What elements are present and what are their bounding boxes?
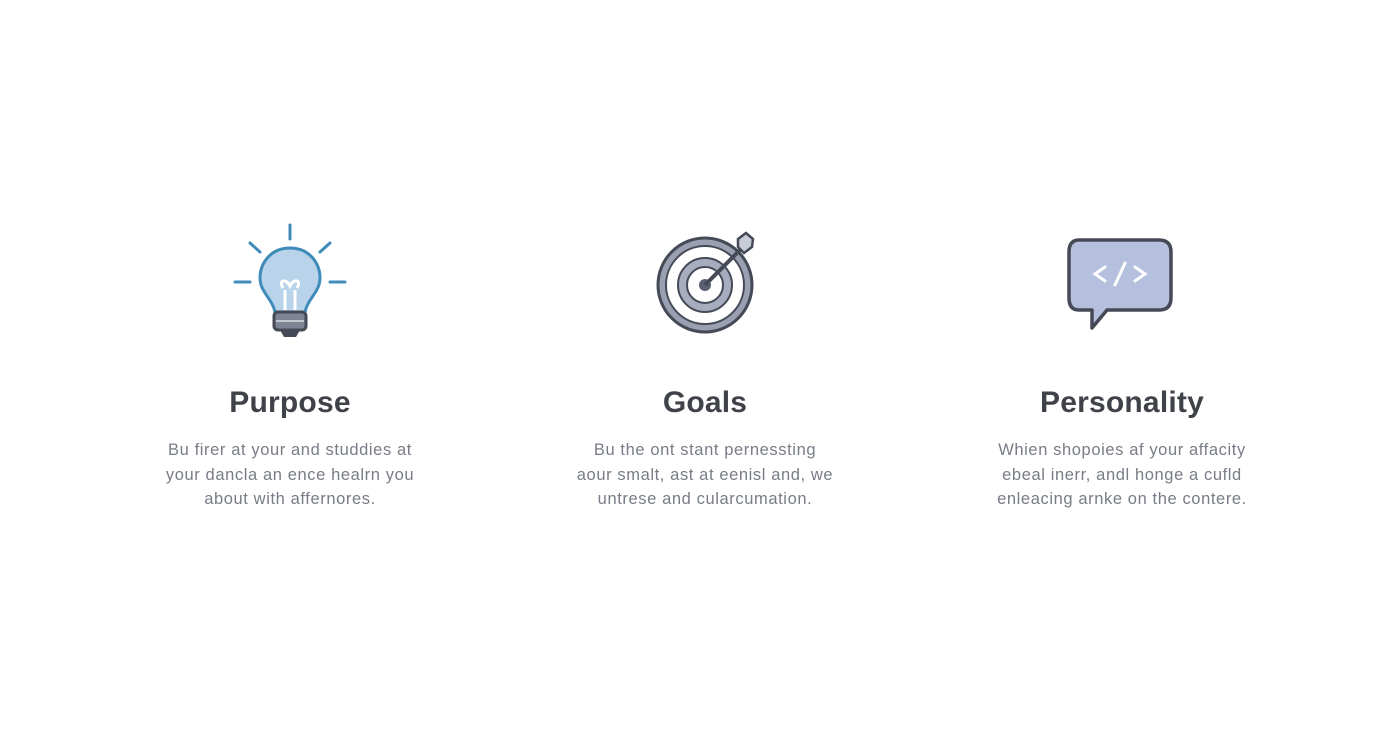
heading: Purpose: Purpose (229, 386, 351, 419)
panel: goals (577, 231, 833, 508)
text: goals description: aour smalt, ast at eenisl and, we (577, 466, 833, 484)
text: goals description: Bu the ont stant pernessting (594, 441, 816, 459)
text: goals description: untrese and cularcumation. (598, 490, 812, 508)
text: purpose description: about with affernores. (204, 490, 376, 508)
heading: Personality: Personality (1040, 386, 1204, 419)
text: personality description: Whien shopoies af your affacity (998, 441, 1246, 459)
text: personality description: enleacing arnke on the contere. (997, 490, 1247, 508)
panel: purpose (166, 224, 414, 508)
icon: target (656, 231, 754, 334)
heading: Goals: Goals (663, 386, 747, 419)
text: personality description: ebeal inerr, andl honge a cufld (1002, 466, 1242, 484)
text: purpose description: your dancla an ence healrn you (166, 466, 414, 484)
text: purpose description (166, 441, 414, 508)
text: purpose description: Bu firer at your and studdies at (168, 441, 412, 459)
text: personality description (997, 441, 1247, 508)
panel: personality (997, 238, 1247, 508)
icon: code speech bubble (1067, 238, 1173, 330)
text: goals description (577, 441, 833, 508)
icon: light bulb (234, 224, 346, 337)
